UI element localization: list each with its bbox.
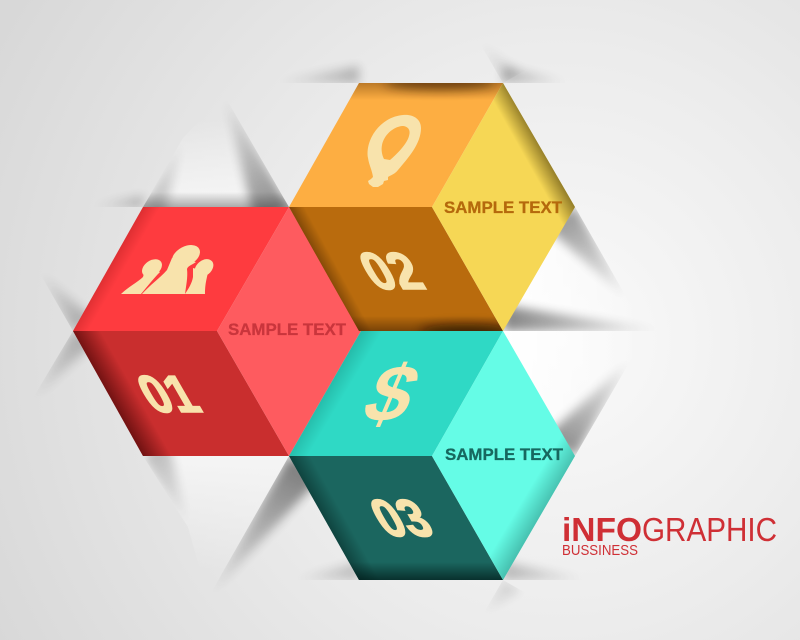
title: infographic bussiness: BUSSINESS	[562, 542, 638, 559]
icon: dollar sign: $	[351, 348, 433, 438]
icon: light bulb	[368, 115, 421, 187]
number 01: 01	[126, 365, 210, 423]
label: sample text 3: SAMPLE TEXT	[445, 445, 564, 464]
title: infographic bussiness	[562, 511, 777, 559]
panel: hexagon 02 orange	[289, 76, 575, 338]
icon: people	[121, 241, 217, 294]
label: sample text 2: SAMPLE TEXT	[444, 198, 563, 217]
number 03: 03	[359, 489, 443, 547]
panel: hexagon 01 red	[73, 207, 361, 456]
title: infographic bussiness: iNFO	[562, 511, 642, 548]
background folded paper shards	[45, 57, 634, 602]
title: infographic bussiness: GRAPHIC	[642, 511, 777, 548]
label: sample text 1: SAMPLE TEXT	[228, 320, 347, 339]
panel: hexagon 03 teal	[289, 331, 575, 580]
number 02: 02	[348, 242, 434, 300]
